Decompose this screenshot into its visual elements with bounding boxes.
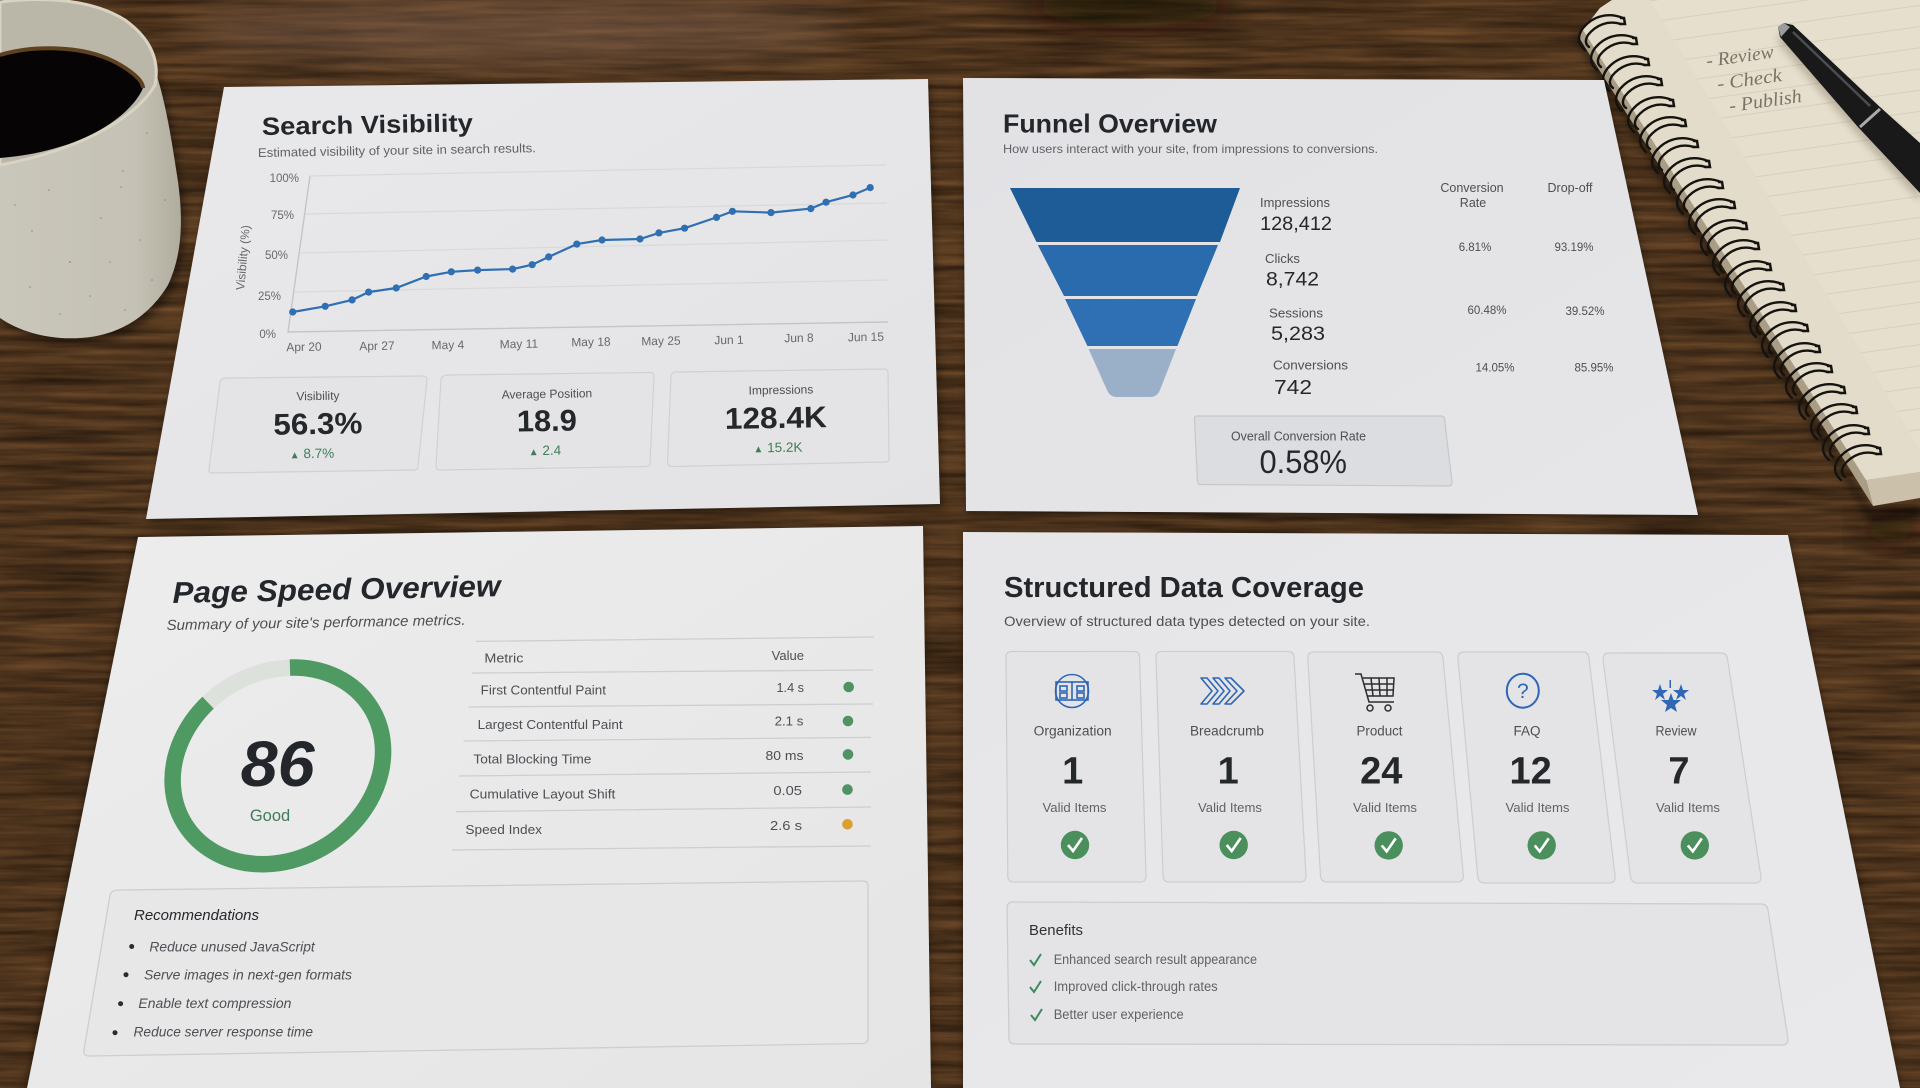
card: product: Product [1356, 724, 1403, 738]
stat card: impressions: 128.4K [725, 401, 827, 436]
icon: question mark [1507, 674, 1539, 708]
metrics table: 0.05 [773, 783, 802, 798]
funnel stage labels: 8,742 [1266, 270, 1319, 290]
conversion and drop-off columns: Drop-off [1548, 181, 1593, 195]
pen [1778, 23, 1920, 201]
panel: search visibility [146, 79, 942, 523]
funnel stage labels: 742 [1274, 377, 1312, 399]
card: faq: 12 [1510, 750, 1552, 792]
metrics table: Total Blocking Time [473, 752, 591, 766]
funnel stage labels: Conversions [1273, 358, 1348, 372]
line chart: visibility over time: 25% [258, 291, 281, 303]
stat card: average position: Average Position [502, 386, 592, 402]
card: review: 7 [1668, 750, 1690, 792]
stat card: impressions [668, 369, 889, 466]
metrics table: Largest Contentful Paint [478, 717, 623, 732]
donut gauge: score 86 [166, 660, 390, 872]
conversion and drop-off columns: 60.48% [1467, 305, 1507, 317]
benefits box: Improved click-through rates [1054, 979, 1218, 994]
panel: structured data coverage [963, 532, 1900, 1088]
line chart: visibility over time: 100% [270, 173, 299, 185]
card: faq: Valid Items [1506, 800, 1570, 815]
card: breadcrumb: 1 [1218, 750, 1239, 792]
callout: overall conversion rate [1194, 416, 1452, 486]
subtitle: funnel overview: How users interact with your site, from impressions to conversions. [1003, 142, 1378, 156]
stat card: visibility: ▲ 8.7% [290, 446, 334, 461]
icon: shopping cart [1355, 674, 1394, 711]
metrics table: Value [772, 648, 804, 663]
stat card: visibility: Visibility [296, 389, 340, 403]
card: product [1308, 652, 1463, 882]
card: product: Valid Items [1353, 800, 1417, 815]
stat card: average position: ▲ 2.4 [529, 443, 562, 458]
spiral rings [1579, 15, 1881, 480]
heading: search visibility: Search Visibility [262, 109, 473, 141]
subtitle: page speed overview: Summary of your site's performance metrics. [166, 613, 466, 634]
conversion and drop-off columns: Rate [1460, 196, 1486, 210]
metrics table: 2.6 s [770, 818, 803, 833]
metrics table [452, 637, 874, 850]
notebook with spiral binding [1575, 0, 1920, 525]
metrics table: Metric [484, 650, 524, 666]
line chart: visibility over time: 50% [265, 250, 288, 262]
metrics table: First Contentful Paint [481, 682, 606, 698]
metrics table: Speed Index [465, 822, 543, 837]
handwritten notes: - Review [1705, 42, 1775, 72]
line chart: visibility over time: Apr 27 [359, 339, 395, 353]
handwritten notes: - Check [1716, 65, 1784, 95]
metrics table: 80 ms [766, 748, 804, 763]
line chart: visibility over time: 75% [271, 210, 294, 222]
line chart: visibility over time [233, 165, 888, 354]
benefits box: Benefits [1029, 922, 1083, 939]
stat card: impressions: ▲ 15.2K [753, 440, 803, 455]
callout: overall conversion rate: Overall Conversion Rate [1231, 430, 1366, 444]
conversion and drop-off columns: 39.52% [1565, 306, 1605, 318]
donut gauge: score 86: 86 [241, 728, 315, 800]
card: breadcrumb: Valid Items [1198, 800, 1262, 815]
recommendations box: Reduce unused JavaScript [149, 940, 316, 954]
metrics table: 2.1 s [775, 714, 804, 728]
heading: funnel overview: Funnel Overview [1003, 108, 1218, 138]
coffee mug [0, 0, 185, 343]
card: organization: 1 [1062, 750, 1083, 792]
subtitle: structured data coverage: Overview of structured data types detected on your site. [1004, 613, 1370, 629]
stat card: visibility: 56.3% [273, 407, 363, 442]
conversion and drop-off columns: 93.19% [1554, 242, 1594, 254]
benefits box: Better user experience [1054, 1007, 1184, 1022]
benefits box [1007, 902, 1788, 1045]
heading: page speed overview: Page Speed Overview [172, 570, 503, 610]
conversion and drop-off columns: 85.95% [1574, 362, 1614, 374]
handwritten notes: - Publish [1728, 86, 1803, 117]
panel: page speed overview [25, 526, 931, 1088]
metrics table: Cumulative Layout Shift [470, 786, 616, 802]
funnel stage labels: Sessions [1269, 306, 1323, 320]
line chart: visibility over time: May 4 [431, 338, 465, 352]
stat card: average position: 18.9 [517, 404, 577, 439]
donut gauge: score 86: Good [250, 807, 290, 825]
card: review [1603, 653, 1761, 883]
recommendations box [84, 881, 868, 1056]
card: review: Valid Items [1656, 800, 1720, 815]
conversion and drop-off columns: 6.81% [1459, 242, 1491, 254]
icon: breadcrumb chevrons [1201, 678, 1244, 704]
funnel chart [1010, 188, 1240, 397]
card: organization: Valid Items [1042, 800, 1107, 815]
conversion and drop-off columns: Conversion [1440, 181, 1504, 195]
heading: structured data coverage: Structured Data Coverage [1004, 572, 1364, 604]
stat card: visibility [209, 376, 427, 473]
stat card: average position [436, 372, 654, 470]
line chart: visibility over time: Jun 15 [848, 330, 884, 344]
line chart: visibility over time: 0% [259, 329, 276, 341]
recommendations box: Serve images in next-gen formats [144, 968, 352, 982]
card: organization [1006, 652, 1146, 882]
panel: funnel overview [963, 78, 1699, 519]
funnel stage labels: Clicks [1265, 252, 1300, 266]
conversion and drop-off columns [1440, 181, 1614, 374]
line chart: visibility over time: Visibility (%) [233, 225, 253, 291]
metrics table: 1.4 s [776, 680, 804, 695]
funnel stage labels: 5,283 [1271, 324, 1325, 345]
card: product: 24 [1360, 750, 1402, 792]
line chart: visibility over time: May 25 [641, 334, 681, 348]
icon: review stars [1652, 680, 1689, 712]
recommendations box: Enable text compression [138, 996, 291, 1011]
benefits box: Enhanced search result appearance [1054, 952, 1257, 967]
card: organization: Organization [1034, 724, 1112, 738]
conversion and drop-off columns: 14.05% [1475, 362, 1515, 374]
funnel stage labels: Impressions [1260, 196, 1330, 210]
card: faq: FAQ [1513, 724, 1541, 738]
icon: question mark: ? [1517, 680, 1529, 703]
handwritten notes [1705, 42, 1803, 117]
card: breadcrumb [1156, 652, 1306, 882]
card: review: Review [1656, 724, 1697, 738]
line chart: visibility over time: Apr 20 [286, 340, 322, 354]
line chart: visibility over time: May 11 [500, 337, 539, 351]
card: breadcrumb: Breadcrumb [1190, 724, 1264, 738]
funnel stage labels: 128,412 [1260, 214, 1332, 235]
recommendations box: Recommendations [134, 908, 259, 924]
funnel stage labels [1260, 196, 1348, 399]
subtitle: search visibility: Estimated visibility of your site in search results. [258, 141, 536, 160]
card: faq [1458, 652, 1615, 883]
icon: organization [1056, 674, 1088, 708]
callout: overall conversion rate: 0.58% [1260, 444, 1347, 480]
line chart: visibility over time: May 18 [571, 335, 611, 349]
recommendations box: Reduce server response time [134, 1024, 313, 1040]
stat card: impressions: Impressions [748, 382, 813, 398]
line chart: visibility over time: Jun 1 [714, 333, 744, 347]
line chart: visibility over time: Jun 8 [784, 331, 814, 345]
